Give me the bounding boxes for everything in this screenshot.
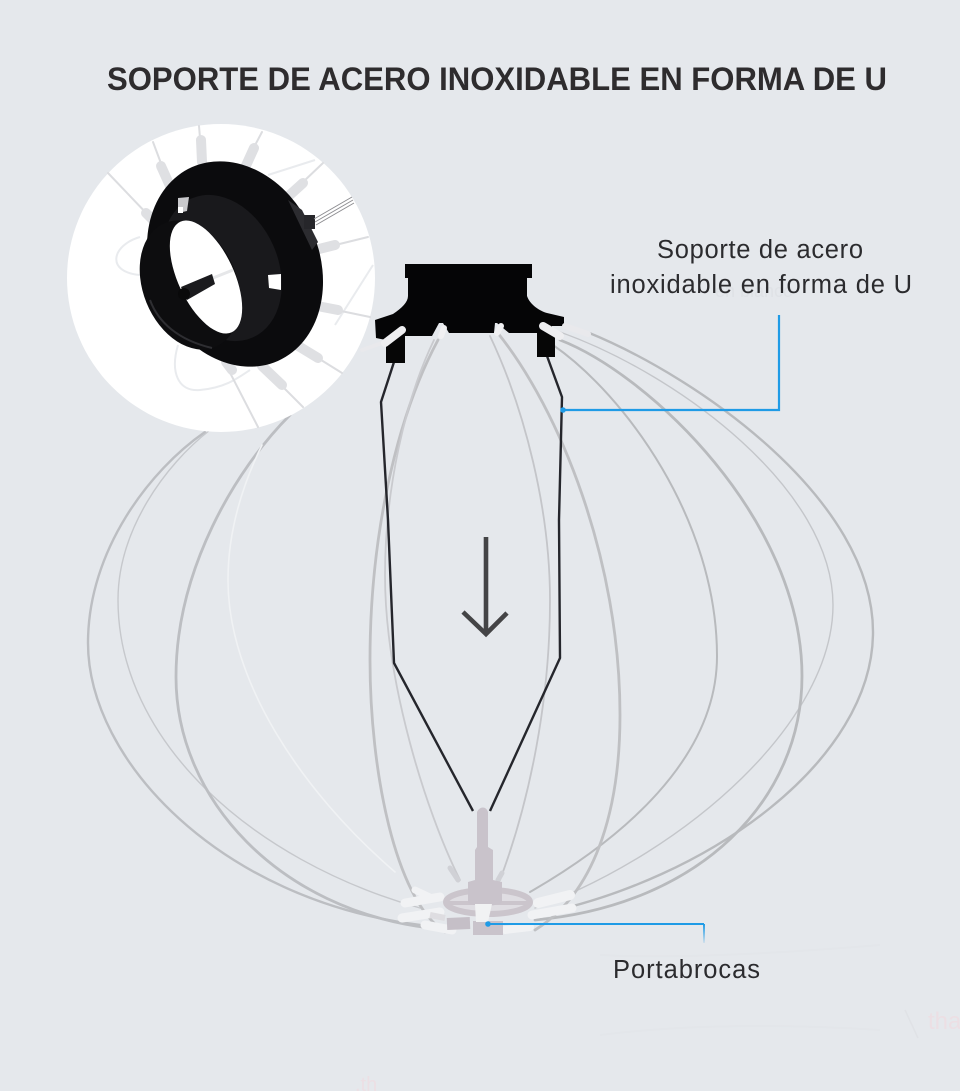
callout line: chuck	[485, 921, 705, 943]
ring flange	[115, 133, 355, 395]
square hole	[268, 274, 281, 290]
tube body	[121, 205, 259, 365]
callout label: U support: Soporte de acero	[657, 236, 863, 264]
title: SOPORTE DE ACERO INOXIDABLE EN FORMA DE U	[107, 61, 887, 97]
side bracket and rods	[288, 200, 318, 250]
callout label: U support: inoxidable en forma de U	[610, 271, 912, 299]
spokes	[108, 126, 370, 427]
faint background ghost marks: en blanco	[715, 281, 793, 301]
inset circle: mount close-up	[67, 124, 375, 432]
lower links	[447, 923, 470, 924]
pin	[181, 274, 215, 300]
white wire tips	[402, 890, 572, 930]
faint background ghost marks	[355, 281, 960, 1091]
chuck hub	[402, 808, 572, 935]
lantern frame wires	[88, 332, 873, 932]
speedring mount	[362, 264, 588, 350]
tube opening	[155, 210, 257, 344]
arrow pointing down	[463, 537, 507, 634]
callout line: U support	[560, 315, 779, 413]
left outer wires	[88, 415, 430, 928]
callout label: chuck: Portabrocas	[613, 956, 760, 984]
wheel	[446, 890, 530, 914]
U-shaped stainless steel support	[381, 330, 562, 811]
wire through opening	[213, 270, 233, 278]
right outer wires	[530, 332, 873, 920]
inner wires	[370, 332, 620, 932]
callout label: U support	[610, 236, 912, 299]
post	[468, 808, 502, 906]
faint wires behind	[116, 160, 373, 390]
inner band	[140, 176, 304, 360]
